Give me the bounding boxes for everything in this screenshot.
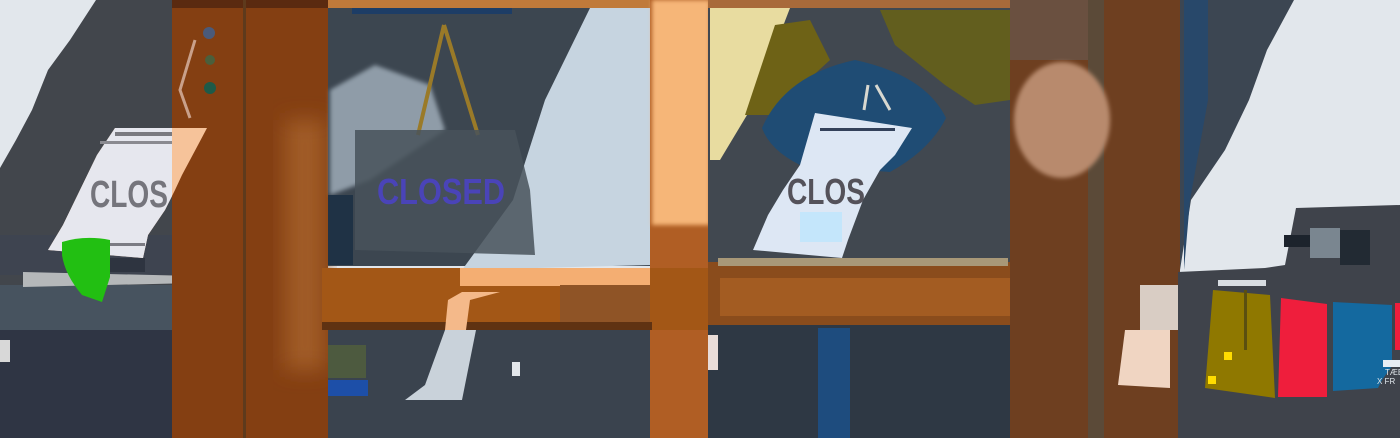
hanging strap xyxy=(864,85,890,110)
left door rail xyxy=(322,268,710,330)
lower right glass xyxy=(708,325,1010,438)
right wall in shadow xyxy=(1178,0,1400,438)
sign text: closed: CLOS xyxy=(90,174,168,216)
hanging sign xyxy=(355,130,535,255)
right door upper glass xyxy=(708,0,1010,266)
centre door stile xyxy=(650,0,710,438)
lower left glass xyxy=(328,330,650,438)
left sign xyxy=(48,128,207,258)
olive poster xyxy=(1205,290,1275,398)
right door rail xyxy=(708,258,1020,326)
red sliver xyxy=(1395,303,1400,350)
green sticker xyxy=(62,238,110,302)
right door stile xyxy=(1010,0,1180,438)
blue poster xyxy=(1333,302,1392,391)
hanging strap xyxy=(418,25,478,135)
left wall in shadow xyxy=(0,0,195,438)
sign text: closed: CLOS xyxy=(787,171,865,212)
poster label xyxy=(1377,360,1400,386)
poster label: X FR xyxy=(1377,377,1395,386)
right sign xyxy=(753,113,912,258)
left window glass xyxy=(328,0,650,270)
left door stile xyxy=(172,0,328,438)
closed text: CLOSED xyxy=(377,171,505,212)
red poster xyxy=(1278,298,1327,397)
